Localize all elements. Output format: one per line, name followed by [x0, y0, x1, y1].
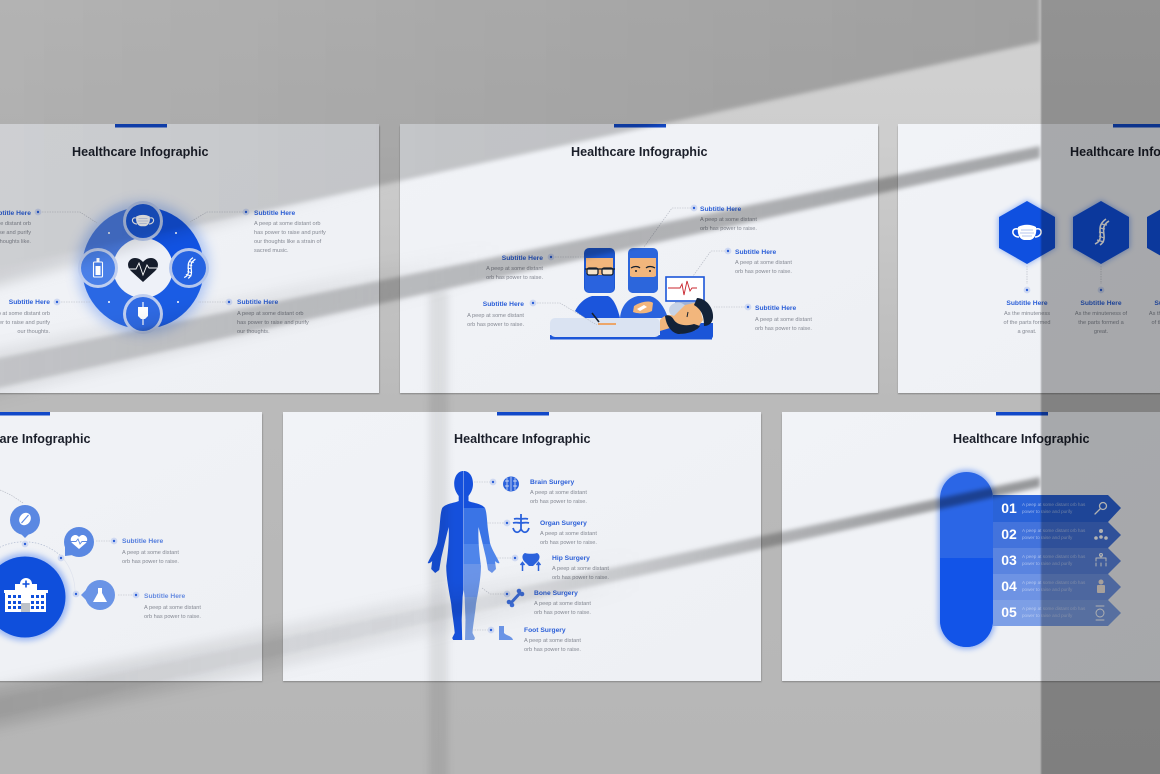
callout: brain: A peep at some distant: [530, 490, 587, 496]
icon: hip: [520, 553, 540, 571]
callout: patient: A peep at some distant: [755, 317, 812, 323]
hexagon: mask: [998, 200, 1056, 335]
accent tab: [1113, 124, 1160, 128]
panel: surgery slide: [400, 124, 878, 393]
list row 02: A peep at some distant orb has: [1022, 528, 1086, 533]
callout: upper right: our thoughts like a strain of: [254, 239, 322, 245]
patient: [660, 298, 713, 334]
callout: upper right: [190, 209, 326, 254]
list row 04: A peep at some distant orb has: [1022, 580, 1086, 585]
callout: organ: [487, 520, 597, 546]
hexagon: dna: Subtitle Here: [1080, 300, 1122, 307]
list row 05: 05: [1001, 604, 1017, 620]
left half: [428, 471, 463, 640]
callout: hip: [497, 555, 609, 581]
accent tab: [115, 124, 167, 128]
callout: flask: A peep at some distant: [144, 605, 201, 611]
icon: iv bag node: [123, 294, 163, 334]
icon: foot: [499, 626, 513, 640]
list row 05: power to raise and purify: [1022, 613, 1073, 618]
list row 04: power to raise and purify: [1022, 587, 1073, 592]
callout: foot: orb has power to raise.: [524, 647, 581, 653]
hexagon: dna: [1072, 200, 1130, 335]
callout: left doctor: A peep at some distant: [486, 266, 543, 272]
callout: upper left: [0, 209, 97, 245]
list row 01: A peep at some distant orb has: [1022, 502, 1086, 507]
callout: hip: A peep at some distant: [552, 566, 609, 572]
list row 04: 04: [1001, 578, 1017, 594]
callout: upper right: has power to raise and purify: [254, 230, 326, 236]
icon: hospital: [4, 578, 48, 612]
callout: lower right: Subtitle Here: [237, 299, 279, 306]
callout: left doctor: Subtitle Here: [502, 255, 543, 262]
list row 03: 03: [1001, 552, 1017, 568]
callout: organ: A peep at some distant: [540, 531, 597, 537]
dashed connectors: [0, 490, 79, 597]
heading: Healthcare Infographic: [953, 432, 1089, 446]
list row 03: A peep at some distant orb has: [1022, 554, 1086, 559]
list row 05: A peep at some distant orb has: [1022, 606, 1086, 611]
callout: patient: Subtitle Here: [755, 305, 797, 312]
hexagon: mask: Subtitle Here: [1006, 300, 1048, 307]
cycle diagram: [77, 201, 209, 334]
callout: upper right: sacred music.: [254, 248, 289, 254]
monitor: [666, 277, 704, 305]
icon: cylinder node: [78, 248, 118, 288]
callout: organ: Organ Surgery: [540, 520, 587, 527]
list row 02: 02: [1001, 526, 1017, 542]
callout: top: Subtitle Here: [700, 206, 742, 213]
hospital hub: [0, 553, 69, 641]
list row 03: [993, 548, 1121, 574]
callout: monitor: A peep at some distant: [735, 260, 792, 266]
callout: bone: A peep at some distant: [534, 601, 591, 607]
list row 01: power to raise and purify: [1022, 509, 1073, 514]
callout: foot: A peep at some distant: [524, 638, 581, 644]
hand with scalpel: [592, 313, 599, 322]
list row 03: power to raise and purify: [1022, 561, 1073, 566]
callout: brain: Brain Surgery: [530, 479, 575, 486]
capsule: [938, 470, 995, 649]
callout: monitor: [693, 248, 792, 276]
list row 02: power to raise and purify: [1022, 535, 1073, 540]
callout: incision: Subtitle Here: [483, 301, 524, 308]
callout: foot: Foot Surgery: [524, 627, 566, 634]
callout: lower right: [198, 299, 309, 335]
callout: bone: Bone Surgery: [534, 590, 578, 597]
callout: left doctor: [486, 254, 584, 281]
callout: incision: orb has power to raise.: [467, 322, 524, 328]
callout: lower right: has power to raise and purify: [237, 320, 309, 326]
callout: heart: A peep at some distant: [122, 550, 179, 556]
icon: flask pin: [81, 580, 115, 610]
callout: lower right: our thoughts.: [237, 329, 270, 335]
icon: heart with pulse: [128, 258, 158, 282]
hexagon: dna: great.: [1094, 329, 1109, 335]
list row 01: 01: [1001, 500, 1017, 516]
hexagon: mask: of the parts formed: [1004, 320, 1050, 326]
callout: heart: [96, 538, 179, 565]
callout: lower left: [0, 299, 90, 335]
right doctor: [620, 248, 668, 318]
callout: upper right: A peep at some distant orb: [254, 221, 321, 227]
icon: bone: [507, 589, 524, 607]
callout: foot: [472, 627, 581, 653]
accent tab: [996, 412, 1048, 416]
bed: [550, 318, 713, 340]
callout: incision: A peep at some distant: [467, 313, 524, 319]
panel: cycle slide: [0, 124, 379, 393]
left doctor: [575, 248, 620, 318]
heading: Healthcare Infographic: [72, 145, 208, 159]
panel: capsule list slide: [782, 412, 1160, 681]
callout: lower left: Subtitle Here: [9, 299, 50, 306]
callout: brain: orb has power to raise.: [530, 499, 587, 505]
icon: pill pin: [10, 505, 40, 538]
list row 01: [993, 495, 1121, 522]
callout: flask: orb has power to raise.: [144, 614, 201, 620]
callout: top: A peep at some distant: [700, 217, 757, 223]
icon: brain: [503, 476, 519, 492]
accent tab: [614, 124, 666, 128]
right half bands: [464, 471, 500, 640]
callout: hip: orb has power to raise.: [552, 575, 609, 581]
callout: incision: [467, 300, 597, 328]
callout: brain: [474, 479, 587, 505]
icon: dna node: [169, 248, 209, 288]
panel: anatomy slide: [283, 412, 761, 681]
callout: bone: [482, 588, 591, 616]
surgery illustration: [550, 248, 713, 340]
heading: Healthcare Infographic: [454, 432, 590, 446]
accent tab: [0, 412, 50, 416]
callout: flask: Subtitle Here: [144, 593, 186, 600]
callout: top: orb has power to raise.: [700, 226, 757, 232]
icon: mask node: [123, 201, 163, 241]
callout: flask: [118, 592, 201, 620]
callout: patient: [714, 304, 812, 332]
accent tab: [497, 412, 549, 416]
callout: organ: orb has power to raise.: [540, 540, 597, 546]
icon: heart pin: [64, 527, 94, 557]
panel: hexagon slide: [898, 124, 1160, 393]
heading: Healthcare Infographic: [571, 145, 707, 159]
hexagon: dna: the parts formed a: [1078, 320, 1125, 326]
list row 05: [993, 600, 1121, 626]
hexagon: mask: As the minuteness: [1004, 311, 1050, 317]
callout: left doctor: orb has power to raise.: [486, 275, 543, 281]
list row 02: [993, 522, 1121, 548]
callout: monitor: orb has power to raise.: [735, 269, 792, 275]
callout: heart: Subtitle Here: [122, 538, 164, 545]
callout: heart: orb has power to raise.: [122, 559, 179, 565]
callout: hip: Hip Surgery: [552, 555, 590, 562]
hexagon: mask: a great.: [1018, 329, 1037, 335]
callout: lower right: A peep at some distant orb: [237, 311, 304, 317]
panel: hospital slide: [0, 412, 262, 681]
list row 04: [993, 574, 1121, 600]
hexagon: third: [1147, 201, 1160, 335]
callout: upper right: Subtitle Here: [254, 210, 296, 217]
slide drop shadows: [0, 126, 1160, 682]
human body figure: [428, 470, 503, 642]
callout: top: [644, 205, 757, 247]
callout: bone: orb has power to raise.: [534, 610, 591, 616]
hexagon: dna: As the minuteness of: [1075, 311, 1128, 317]
callout: monitor: Subtitle Here: [735, 249, 777, 256]
callout: patient: orb has power to raise.: [755, 326, 812, 332]
callout: lower left: our thoughts.: [17, 329, 50, 335]
icon: ribcage: [513, 514, 529, 532]
